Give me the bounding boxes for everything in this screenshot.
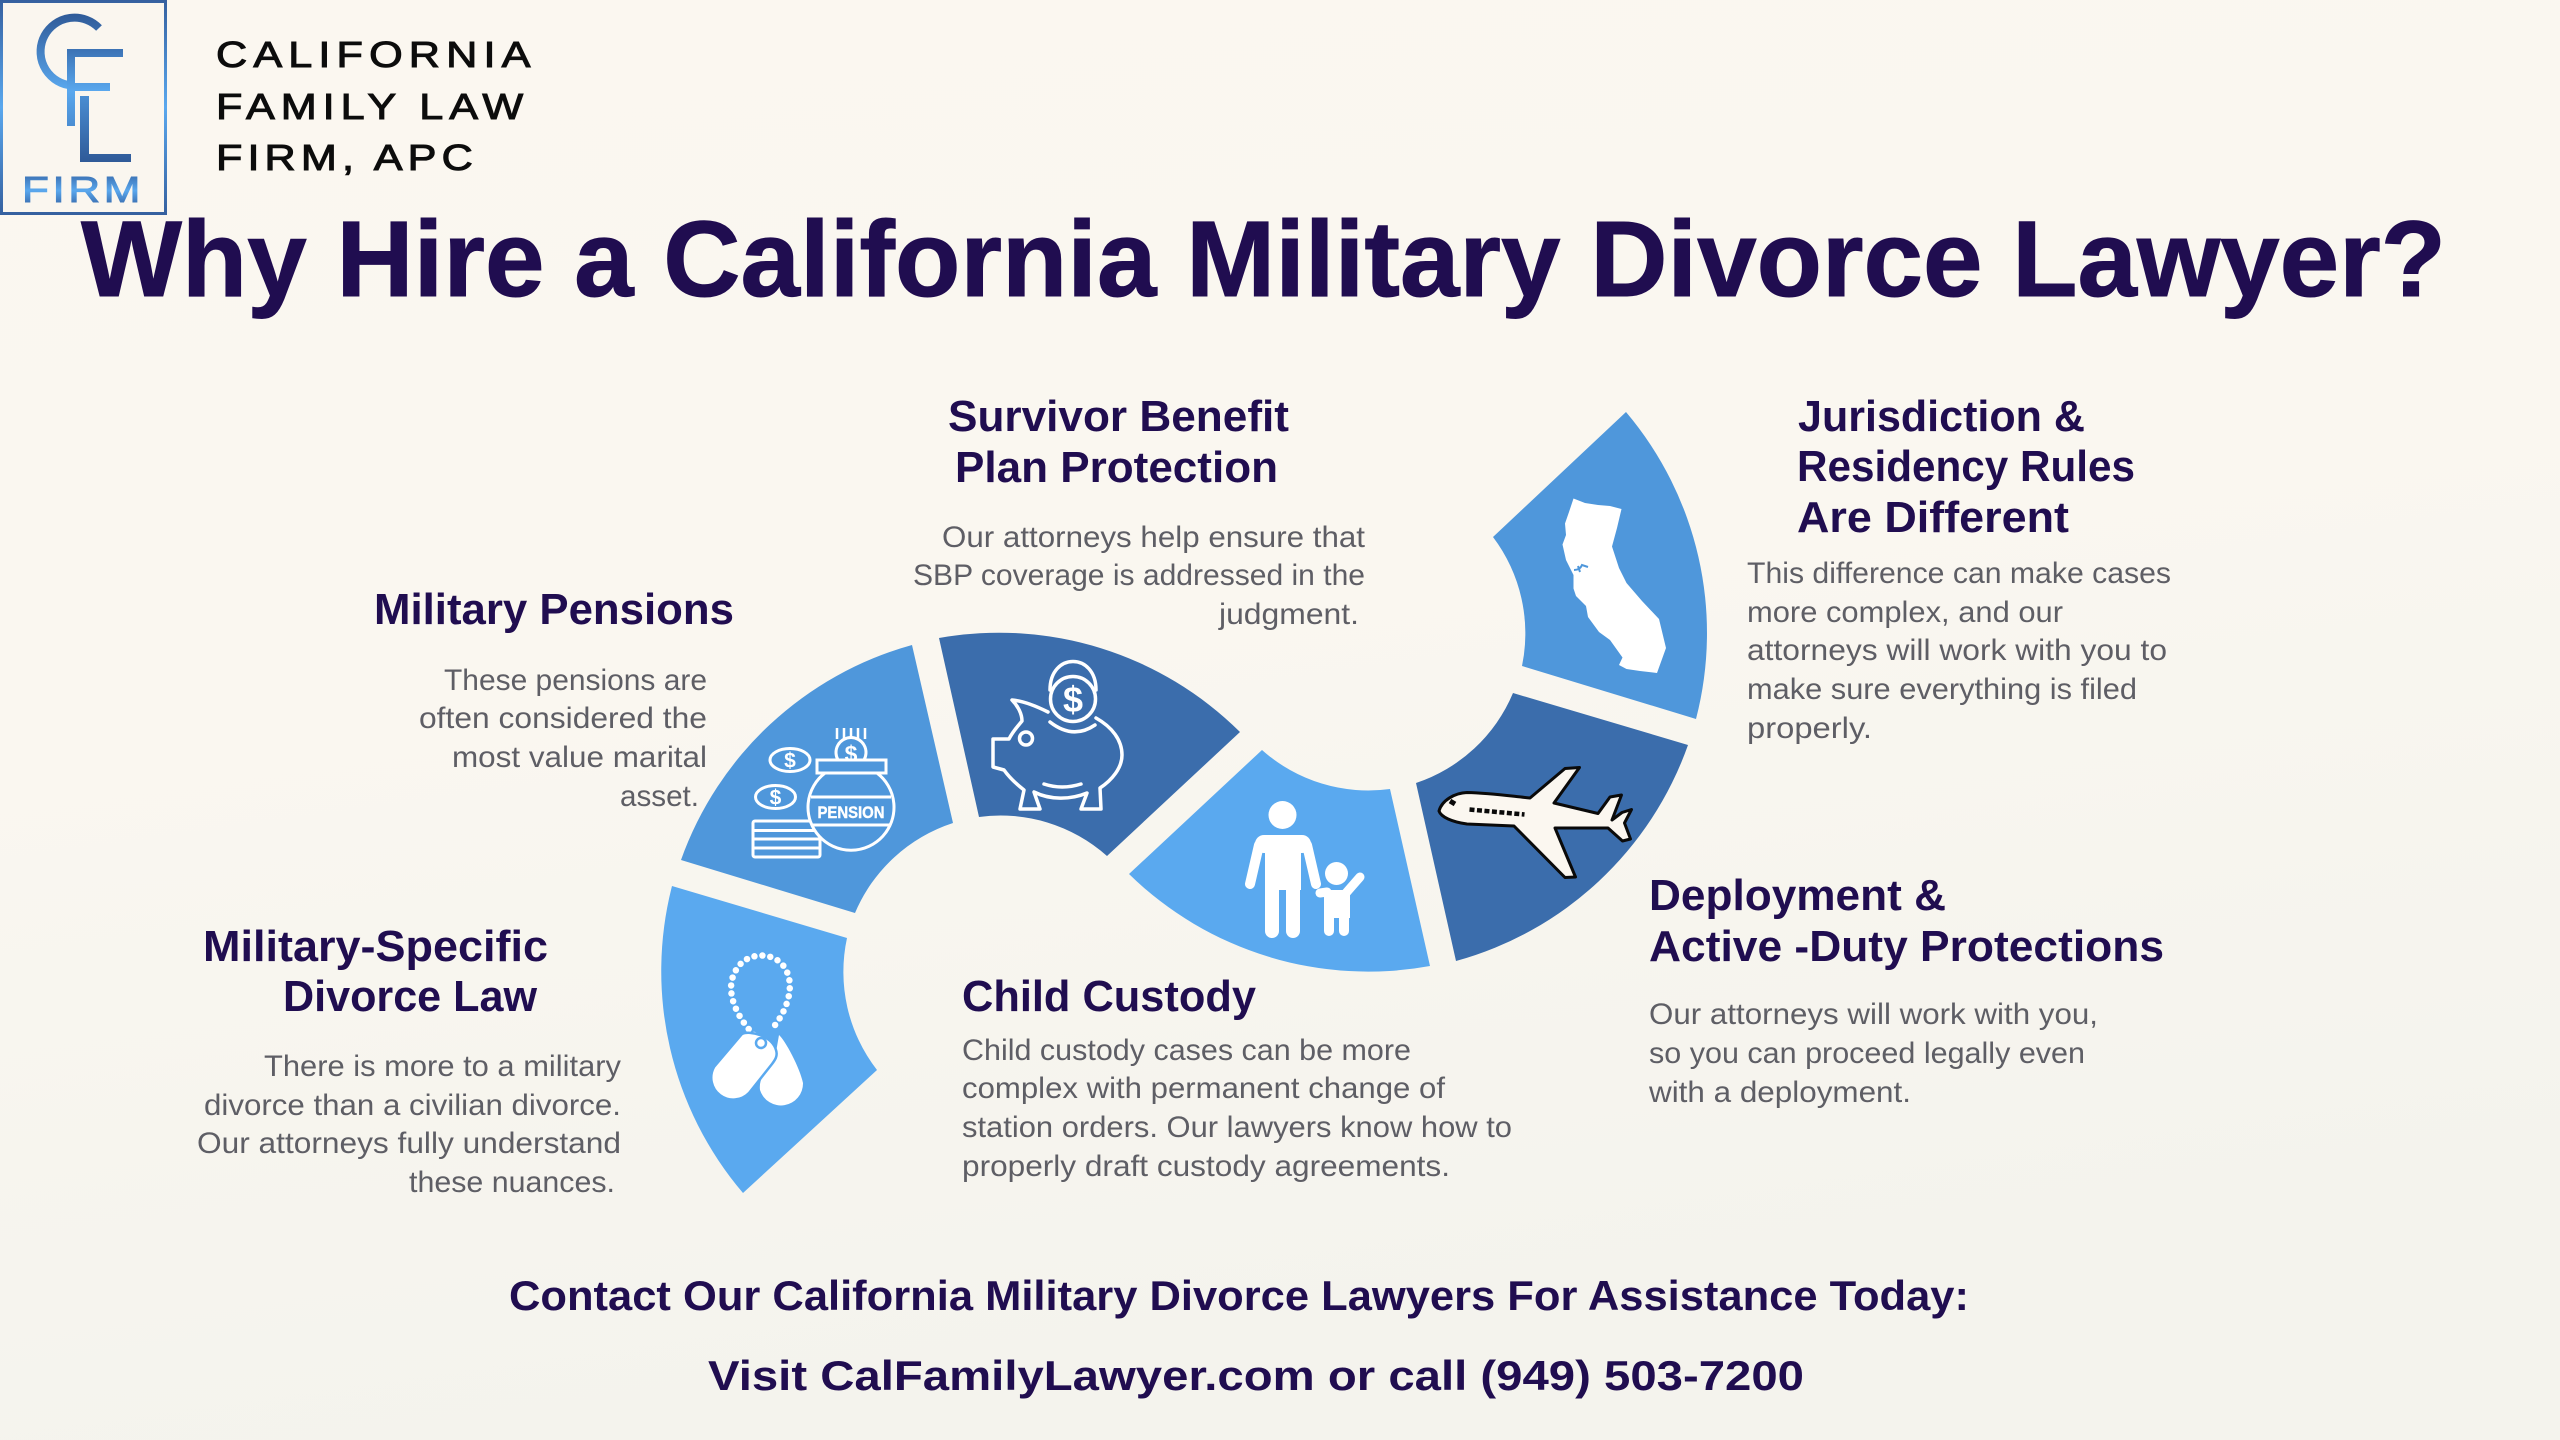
icon: piggy bank — [993, 662, 1122, 809]
icon: pension jar and coins: $ — [845, 741, 858, 767]
body text: complex with permanent change of — [962, 1072, 1446, 1105]
segment: military-specific divorce law — [661, 886, 877, 1193]
body text: station orders. Our lawyers know how to — [962, 1111, 1512, 1144]
body text: Our attorneys help ensure that — [942, 521, 1366, 554]
body text: asset. — [620, 780, 699, 813]
heading: Are Different — [1797, 493, 2069, 542]
logo: CFL Firm: FIRM — [22, 169, 144, 210]
block: jurisdiction and residency rules — [1747, 392, 2171, 745]
heading: Child Custody — [962, 972, 1257, 1021]
body text — [197, 1050, 621, 1199]
body text: This difference can make cases — [1747, 557, 2171, 590]
block: child custody — [962, 972, 1512, 1183]
body text — [962, 1034, 1512, 1183]
body text: most value marital — [452, 741, 707, 774]
body text: often considered the — [419, 702, 707, 735]
heading: Divorce Law — [283, 972, 538, 1021]
body text: attorneys will work with you to — [1747, 634, 2167, 667]
body text — [1648, 998, 2098, 1109]
icon: airplane — [1439, 768, 1632, 878]
body text: with a deployment. — [1648, 1076, 1911, 1109]
heading: Plan Protection — [955, 443, 1278, 492]
body text: There is more to a military — [264, 1050, 621, 1083]
title: Why Hire a California Military Divorce Lawyer? — [81, 198, 2446, 319]
company name: FIRM, APC — [216, 138, 473, 178]
company name: CALIFORNIA — [216, 35, 531, 75]
call to action: Visit CalFamilyLawyer.com or call (949) 503-7200 — [708, 1352, 1804, 1399]
segment: survivor benefit plan — [939, 633, 1240, 856]
heading: Military Pensions — [374, 585, 734, 634]
heading: Deployment & — [1649, 871, 1946, 920]
body text: properly. — [1747, 712, 1872, 745]
body text: These pensions are — [444, 664, 707, 697]
icon: pension jar and coins: $ — [770, 786, 782, 810]
block: survivor benefit plan protection — [913, 392, 1366, 631]
heading: Active -Duty Protections — [1649, 922, 2164, 971]
block: military pensions — [374, 585, 734, 813]
heading — [948, 392, 1289, 492]
body text — [1747, 557, 2171, 745]
logo: CFL Firm — [2, 2, 166, 214]
icon: parent and child — [1250, 801, 1360, 931]
body text: Child custody cases can be more — [962, 1034, 1411, 1067]
body text: divorce than a civilian divorce. — [204, 1089, 621, 1122]
body text: Our attorneys will work with you, — [1649, 998, 2098, 1031]
heading — [203, 922, 548, 1021]
company name — [216, 35, 531, 178]
call to action — [509, 1272, 1969, 1399]
heading: Survivor Benefit — [948, 392, 1289, 441]
heading — [1649, 871, 2164, 971]
body text: SBP coverage is addressed in the — [913, 559, 1365, 592]
body text: make sure everything is filed — [1747, 673, 2137, 706]
body text — [419, 664, 707, 813]
icon: pension jar and coins — [753, 728, 894, 857]
segment: child custody — [1129, 750, 1430, 972]
company name: FAMILY LAW — [216, 87, 524, 127]
heading — [1797, 392, 2135, 542]
segment: jurisdiction and residency — [1493, 412, 1707, 719]
body text: so you can proceed legally even — [1649, 1037, 2085, 1070]
segment: deployment and active-duty — [1416, 693, 1688, 961]
segment: military pensions — [681, 645, 953, 913]
call to action: Contact Our California Military Divorce Lawyers For Assistance Today: — [509, 1272, 1969, 1319]
block: military-specific divorce law — [197, 922, 621, 1199]
body text: judgment. — [1218, 598, 1359, 631]
heading: Jurisdiction & — [1798, 392, 2085, 441]
body text: properly draft custody agreements. — [962, 1150, 1450, 1183]
body text: these nuances. — [409, 1166, 615, 1199]
heading: Military-Specific — [203, 922, 548, 971]
body text: Our attorneys fully understand — [197, 1127, 621, 1160]
icon: California map — [1562, 498, 1666, 673]
body text: more complex, and our — [1747, 596, 2063, 629]
icon: pension jar and coins: PENSION — [818, 803, 884, 822]
heading: Residency Rules — [1797, 442, 2135, 491]
body text — [913, 521, 1366, 631]
icon: piggy bank: $ — [1063, 679, 1083, 720]
icon: dog tags — [711, 956, 803, 1105]
block: deployment and active-duty protections — [1648, 871, 2164, 1109]
icon: pension jar and coins: $ — [784, 750, 796, 772]
